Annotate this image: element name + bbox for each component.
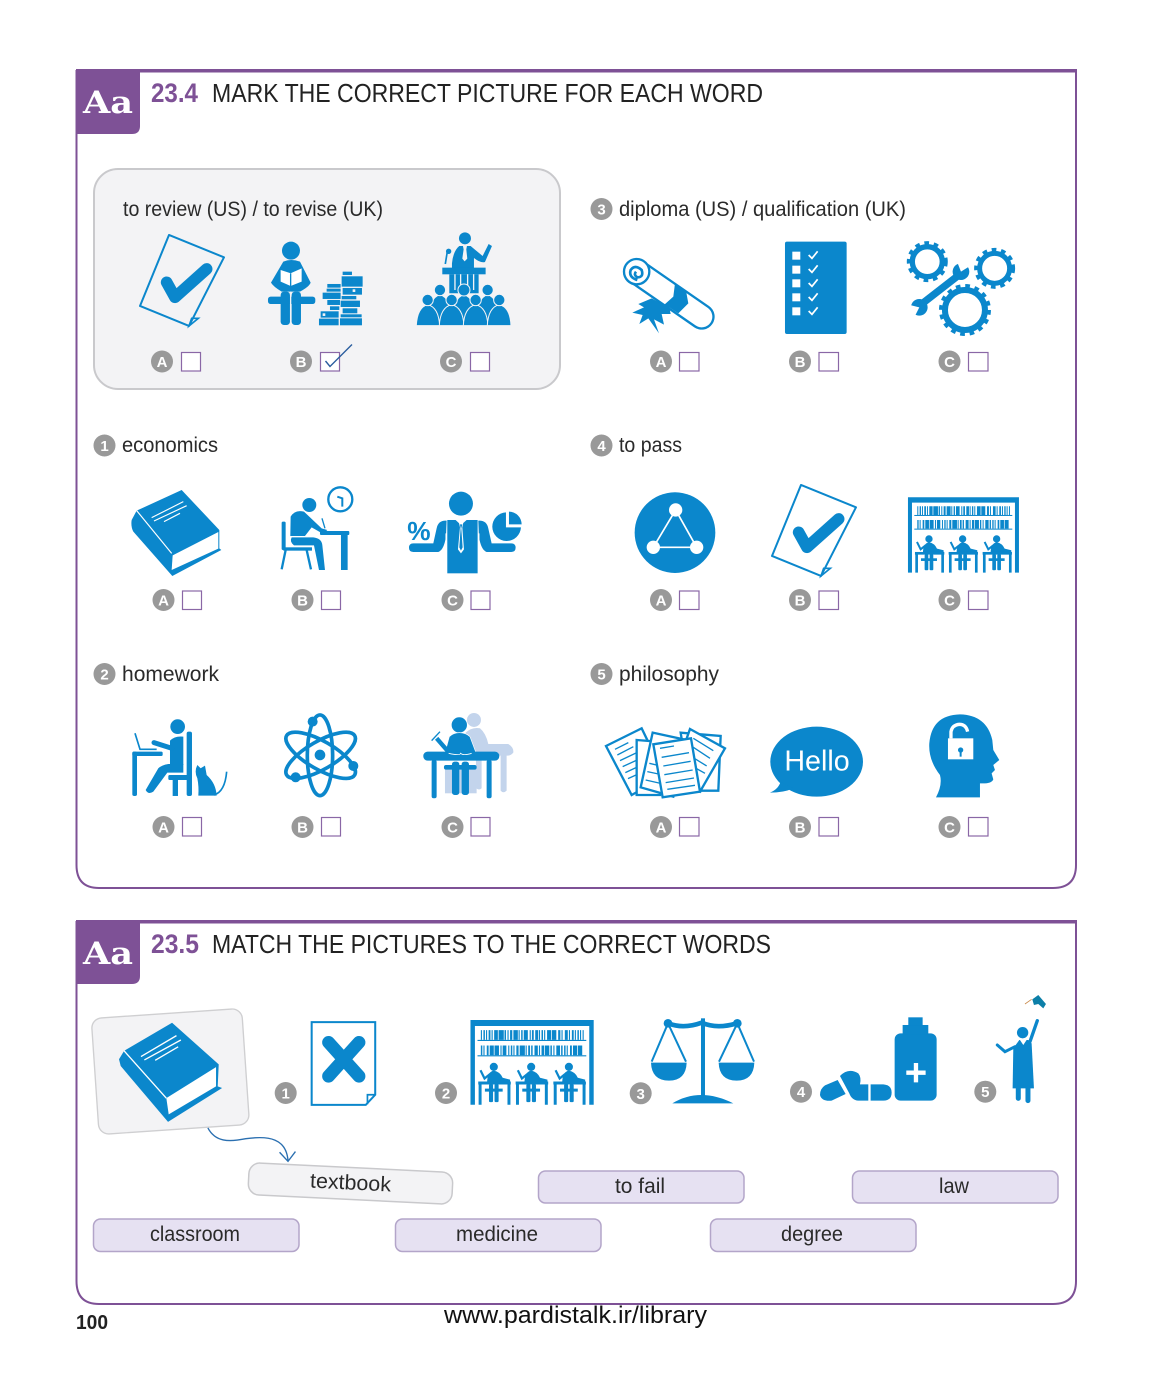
icon: classroom: [470, 1020, 594, 1105]
heading tab: Aa: [76, 70, 140, 134]
option B, item 3: [789, 350, 838, 372]
heading tab: Aa: Aa: [82, 936, 133, 972]
option C, example: [440, 350, 490, 372]
option A, item 3: [650, 350, 699, 372]
option C, item 5: C: [944, 820, 955, 836]
option A, item 4: A: [656, 592, 667, 610]
item 1 heading: economics: [122, 434, 218, 457]
option B, example, ticked: B: [296, 354, 307, 371]
option C, item 1: C: [447, 592, 458, 610]
heading tab: Aa: [76, 921, 140, 984]
option A, item 4: [650, 589, 699, 611]
number 1: [275, 1082, 297, 1104]
item 3 heading: diploma (US) / qualification (UK): [619, 198, 906, 221]
item 5 heading: 5: [597, 666, 606, 684]
icon: person at laptop with cat: [132, 719, 227, 796]
item 2 heading: homework: [122, 663, 219, 686]
item 4 heading: [590, 434, 682, 457]
option A, item 5: A: [656, 820, 667, 836]
option B, item 4: B: [795, 592, 806, 610]
number 4: 4: [797, 1084, 806, 1101]
icon: failed document: [312, 1022, 375, 1105]
heading: 23.5: MATCH THE PICTURES TO THE CORRECT WORDS: [212, 929, 771, 959]
answer label: textbook: textbook: [310, 1170, 392, 1196]
option A, item 5: [650, 816, 699, 838]
heading: 23.5: 23.5: [151, 929, 199, 959]
option A, example: A: [157, 354, 168, 371]
number 5: [974, 1081, 996, 1103]
word: degree: [710, 1219, 916, 1252]
icon: graduate: [997, 995, 1046, 1101]
word: law: [852, 1171, 1058, 1203]
option A, item 3: A: [656, 354, 667, 371]
icon: classroom: [908, 497, 1019, 573]
heading: 23.4: MARK THE CORRECT PICTURE FOR EACH WORD: [212, 78, 763, 108]
option B, example, ticked: [290, 344, 352, 372]
number 5: 5: [981, 1084, 989, 1101]
example word: to review (US) / to revise (UK): [123, 198, 383, 221]
page number: 100: [76, 1312, 108, 1334]
option C, item 2: [442, 816, 490, 838]
icon: gears and wrench: [908, 243, 1013, 334]
option A, item 2: A: [158, 820, 169, 836]
word: medicine: [396, 1219, 601, 1252]
item 5 heading: philosophy: [619, 663, 719, 686]
panel: exercise 23.5: [76, 920, 1077, 1304]
option A, item 1: A: [158, 592, 169, 610]
item 4 heading: to pass: [619, 434, 682, 457]
website address: www.pardistalk.ir/library: [443, 1302, 707, 1329]
icon: head with open padlock: [929, 714, 999, 797]
icon: speech bubble with Hello: [770, 727, 863, 797]
percent sign: %: [407, 516, 431, 546]
icon: scales of justice: [651, 1018, 754, 1103]
option B, item 5: [789, 816, 838, 838]
icon: triangle in circle: [635, 492, 715, 573]
option A, item 2: [152, 816, 202, 838]
option B, item 2: [292, 816, 340, 838]
number 3: 3: [637, 1086, 645, 1103]
item 4 heading: 4: [597, 438, 606, 455]
number 1: 1: [282, 1086, 290, 1102]
icon: speaker at a lectern with audience: [416, 232, 511, 326]
item 3 heading: 3: [597, 202, 606, 218]
word: to fail: to fail: [615, 1175, 665, 1198]
option B, item 2: B: [297, 820, 308, 836]
heading tab: Aa: Aa: [82, 85, 133, 121]
icon: checked document: [140, 235, 224, 326]
word: classroom: classroom: [150, 1223, 240, 1246]
icon: checked document: [772, 485, 856, 576]
word: medicine: medicine: [456, 1223, 538, 1246]
option C, item 4: [938, 589, 988, 611]
option C, example: C: [446, 354, 457, 371]
arrow: example to word: [208, 1128, 295, 1161]
number 2: 2: [442, 1086, 450, 1102]
icon: diploma scroll: [624, 259, 702, 333]
word: law: law: [939, 1175, 970, 1198]
option B, item 1: [292, 589, 340, 611]
icon: student with helper: [423, 713, 513, 798]
option B, item 1: B: [297, 592, 308, 610]
option C, item 3: C: [944, 354, 955, 371]
panel: worked example: [94, 169, 560, 389]
option C, item 4: C: [944, 592, 955, 610]
icon: stack of papers: [606, 728, 725, 797]
handwritten tick: [326, 344, 352, 366]
word: classroom: [94, 1219, 299, 1252]
item 2 heading: 2: [100, 666, 109, 684]
icon: checklist: [785, 242, 847, 334]
number 2: [435, 1082, 457, 1104]
icon: textbook: [131, 490, 221, 576]
option A, example: [151, 350, 200, 372]
word: to fail: [538, 1171, 744, 1203]
heading: 23.4: 23.4: [151, 78, 198, 108]
icon: pills and bottle: [820, 1017, 937, 1101]
number 3: [630, 1082, 652, 1104]
option C, item 2: C: [447, 820, 458, 836]
panel: exercise 23.4: [76, 69, 1077, 888]
item 1 heading: 1: [100, 438, 109, 455]
option B, item 3: B: [795, 354, 806, 371]
option B, item 4: [789, 589, 838, 611]
icon: economist with percent and pie chart: [407, 492, 522, 573]
icon: person reading with books: [268, 242, 363, 325]
number 4: [790, 1081, 812, 1103]
option A, item 1: [152, 589, 202, 611]
icon: speech bubble with Hello: Hello: [784, 746, 850, 778]
example card: textbook picture: [91, 1008, 250, 1135]
option C, item 3: [938, 350, 988, 372]
answer label: textbook: [248, 1163, 453, 1204]
option C, item 1: [442, 589, 490, 611]
icon: atom: [280, 715, 362, 796]
word: degree: degree: [781, 1223, 843, 1246]
option C, item 5: [938, 816, 988, 838]
icon: person studying by a clock: [282, 487, 352, 570]
option B, item 5: B: [795, 820, 806, 836]
